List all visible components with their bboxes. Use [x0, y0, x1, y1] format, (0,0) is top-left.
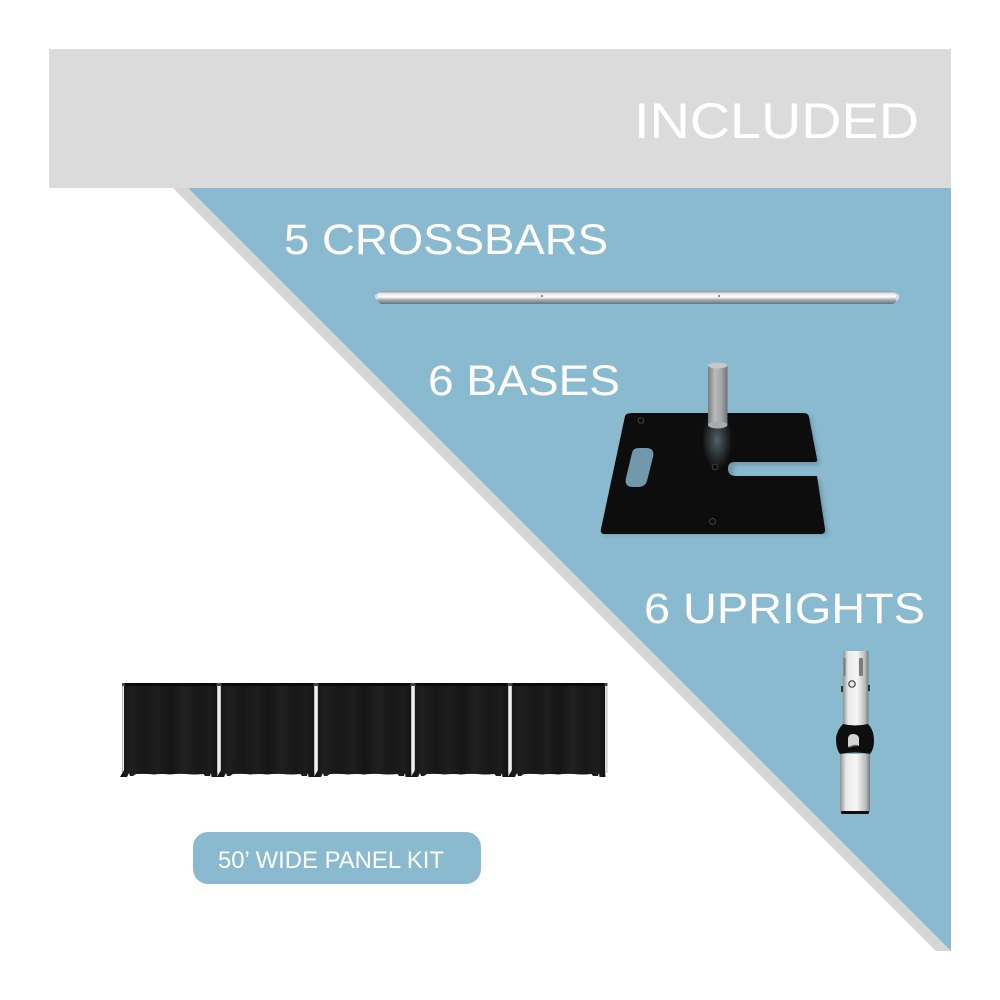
blue triangle panel	[188, 188, 951, 951]
post caps	[122, 683, 608, 686]
button: panel kit label: 50’ WIDE PANEL KIT	[218, 847, 444, 874]
button: panel kit label	[193, 832, 481, 884]
label: 5 crossbars: 5 CROSSBARS	[284, 216, 608, 264]
triangle shadow band	[173, 188, 951, 951]
image: curtain panel run	[120, 683, 608, 777]
upright posts	[122, 684, 607, 774]
icon: base plate	[601, 362, 828, 535]
heading: included: INCLUDED	[634, 93, 919, 149]
label: 6 bases: 6 BASES	[428, 357, 620, 405]
label: 6 uprights: 6 UPRIGHTS	[644, 585, 925, 633]
header band	[49, 49, 951, 188]
icon: upright connector	[836, 651, 874, 814]
icon: crossbar	[375, 291, 899, 304]
